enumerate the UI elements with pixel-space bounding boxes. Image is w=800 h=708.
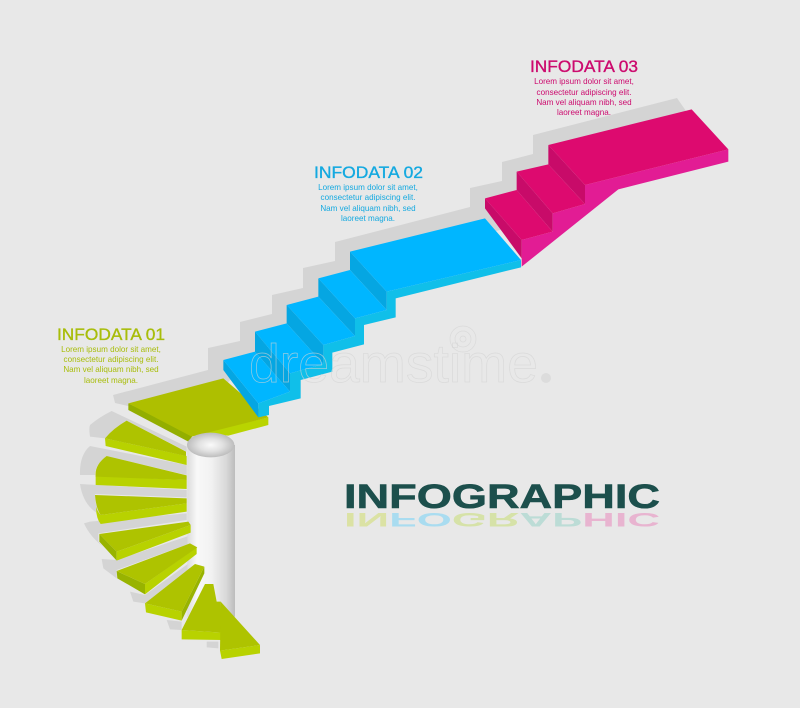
watermark: dreamstime bbox=[249, 334, 538, 394]
magenta treads bbox=[485, 109, 728, 240]
spiral step 6 bbox=[145, 564, 204, 621]
body: infodata 03: consectetur adipiscing elit. bbox=[537, 88, 631, 97]
body: infodata 01: laoreet magna. bbox=[84, 376, 138, 385]
spiral step 8 bbox=[220, 602, 260, 659]
spiral shadows bbox=[80, 411, 218, 648]
text block: infodata 01 bbox=[57, 325, 165, 385]
body: infodata 03: laoreet magna. bbox=[557, 108, 611, 117]
body: infodata 02: Lorem ipsum dolor sit amet, bbox=[318, 183, 418, 192]
spiral step 3 bbox=[95, 495, 187, 524]
landing left face bbox=[128, 403, 193, 442]
spiral staircase bbox=[80, 411, 260, 659]
landing top bbox=[128, 378, 268, 437]
blue front faces bbox=[258, 260, 521, 417]
body: infodata 03 bbox=[534, 77, 634, 117]
body: infodata 02 bbox=[318, 183, 418, 223]
heading: infodata 01: INFODATA 01 bbox=[57, 325, 165, 344]
blue stairs bbox=[223, 218, 521, 417]
body: infodata 01 bbox=[61, 345, 161, 385]
body: infodata 02: consectetur adipiscing elit. bbox=[321, 193, 415, 202]
text block: infodata 03 bbox=[530, 57, 638, 117]
magenta stairs bbox=[485, 109, 728, 267]
spiral step 5 bbox=[117, 543, 197, 594]
stair shadow bbox=[113, 98, 686, 406]
central column bbox=[187, 433, 235, 617]
body: infodata 01: Lorem ipsum dolor sit amet, bbox=[61, 345, 161, 354]
heading: infodata 03: INFODATA 03 bbox=[530, 57, 638, 76]
spiral step 2 bbox=[96, 456, 187, 489]
spiral step 1 bbox=[105, 421, 187, 465]
body: infodata 03: Lorem ipsum dolor sit amet, bbox=[534, 77, 634, 86]
blue treads bbox=[223, 218, 521, 403]
heading: infodata 02: INFODATA 02 bbox=[314, 163, 423, 182]
text block: infodata 02 bbox=[314, 163, 423, 223]
magenta front faces bbox=[522, 149, 728, 267]
spiral step 7 bbox=[182, 584, 222, 640]
body: infodata 01: consectetur adipiscing elit. bbox=[64, 355, 158, 364]
spiral step 4 bbox=[99, 522, 191, 561]
landing front face bbox=[200, 417, 268, 436]
body: infodata 02: laoreet magna. bbox=[341, 214, 395, 223]
title reflection: IN FO GR AP HIC bbox=[344, 509, 660, 530]
body: infodata 03: Nam vel aliquam nibh, sed bbox=[536, 98, 632, 107]
body: infodata 01: Nam vel aliquam nibh, sed bbox=[63, 365, 159, 374]
magenta side faces bbox=[485, 145, 585, 258]
green landing bbox=[128, 378, 268, 442]
body: infodata 02: Nam vel aliquam nibh, sed bbox=[320, 204, 416, 213]
blue side faces bbox=[223, 252, 387, 417]
title: INFOGRAPHIC bbox=[344, 478, 660, 516]
